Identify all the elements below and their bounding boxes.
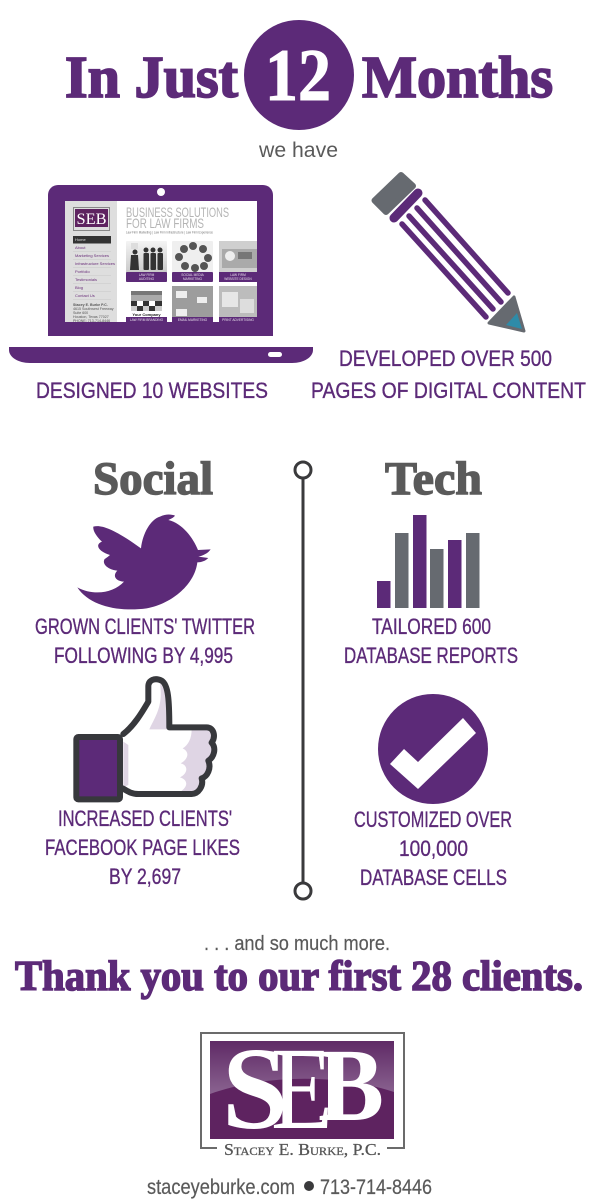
screenshot navigation: Marketing Services xyxy=(75,253,109,258)
icon: bar chart xyxy=(377,515,480,608)
caption: database cells xyxy=(354,807,512,890)
icon: twitter bird xyxy=(77,515,211,609)
screenshot tiles: Your Company xyxy=(132,312,161,317)
screenshot logo: SEB xyxy=(76,211,106,228)
title badge: 12: 12 xyxy=(265,35,331,117)
icon: pencil xyxy=(374,175,524,331)
screenshot navigation: Portfolio xyxy=(75,269,90,274)
screenshot address: 4615 Southwest Freeway xyxy=(73,307,114,311)
screenshot heading xyxy=(126,204,229,234)
caption: developed over 500 pages of digital content xyxy=(311,346,586,403)
heading: tech: Tech xyxy=(385,453,482,505)
caption: developed over 500 pages of digital content: DEVELOPED OVER 500 xyxy=(339,346,552,371)
screenshot address: Houston, Texas 77027 xyxy=(73,315,109,319)
logo: Stacey E. Burke, P.C.: E xyxy=(271,1023,333,1154)
screenshot heading: Law Firm Marketing | Law Firm Infrastructure | Law Firm Experience xyxy=(126,230,213,234)
caption: facebook page likes xyxy=(45,806,240,889)
screenshot address: Stacey E. Burke P.C. xyxy=(73,303,108,307)
caption: facebook page likes: FACEBOOK PAGE LIKES xyxy=(45,835,240,860)
caption: database reports: DATABASE REPORTS xyxy=(344,643,518,668)
footer contact line xyxy=(147,1176,432,1199)
heading: social: Social xyxy=(93,453,213,505)
caption: database reports xyxy=(344,614,518,668)
screenshot heading: BUSINESS SOLUTIONS xyxy=(126,204,229,220)
screenshot navigation: Home xyxy=(75,237,86,242)
caption: database reports: TAILORED 600 xyxy=(372,614,491,639)
logo: Stacey E. Burke, P.C.: Stacey E. Burke, P.C. xyxy=(224,1140,381,1159)
screenshot address: Suite 600 xyxy=(73,311,88,315)
caption: database cells: DATABASE CELLS xyxy=(360,865,507,890)
title badge: 12 xyxy=(244,20,354,130)
screenshot address xyxy=(73,303,114,323)
icon: laptop with website screenshot xyxy=(9,185,313,363)
closing headline: Thank you to our first 28 clients. xyxy=(15,954,583,1000)
caption: facebook page likes: INCREASED CLIENTS' xyxy=(58,806,232,831)
title: Months xyxy=(362,44,553,110)
screenshot tiles xyxy=(126,241,257,322)
logo: Stacey E. Burke, P.C.: B xyxy=(318,1028,384,1143)
caption: twitter following xyxy=(35,614,255,668)
screenshot tiles: SOCIAL MEDIA xyxy=(181,273,205,277)
title xyxy=(65,20,553,130)
screenshot tiles: LAW FIRM xyxy=(230,273,246,277)
screenshot tiles: EMAIL MARKETING xyxy=(178,318,208,322)
logo: Stacey E. Burke, P.C.: S xyxy=(222,1023,288,1154)
screenshot tiles: LAW FIRM BRANDING xyxy=(130,318,164,322)
screenshot address: PHONE: 713-714-8446 xyxy=(73,319,110,323)
screenshot tiles: LAW FIRM xyxy=(139,273,155,277)
screenshot navigation: Testimonials xyxy=(75,277,97,282)
icon: thumbs up xyxy=(76,679,214,799)
icon: check mark badge xyxy=(378,694,488,804)
text: and so much more: . . . and so much more. xyxy=(204,933,390,955)
center divider line xyxy=(295,462,311,899)
caption: database cells: CUSTOMIZED OVER xyxy=(354,807,512,832)
caption: twitter following: GROWN CLIENTS' TWITTER xyxy=(35,614,255,639)
caption: designed 10 websites: DESIGNED 10 WEBSITES xyxy=(36,378,268,403)
caption: database cells: 100,000 xyxy=(399,836,468,861)
screenshot logo xyxy=(74,208,110,230)
caption: facebook page likes: BY 2,697 xyxy=(109,864,181,889)
screenshot tiles: WEBSITE DESIGN xyxy=(224,277,252,281)
screenshot heading: FOR LAW FIRMS xyxy=(126,215,204,231)
screenshot navigation: Infrastructure Services xyxy=(75,261,115,266)
caption: twitter following: FOLLOWING BY 4,995 xyxy=(54,643,233,668)
subtitle: we have: we have xyxy=(258,139,338,162)
screenshot navigation: Blog xyxy=(75,285,83,290)
screenshot tiles: MARKETING xyxy=(183,277,202,281)
title: In Just xyxy=(65,44,238,110)
footer contact line: 713-714-8446 xyxy=(320,1176,432,1199)
screenshot tiles: AUDITING xyxy=(139,277,155,281)
screenshot navigation xyxy=(75,237,115,298)
screenshot tiles: PRINT ADVERTISING xyxy=(222,318,254,322)
screenshot navigation: Contact Us xyxy=(75,293,95,298)
website screenshot xyxy=(65,201,257,323)
logo: Stacey E. Burke, P.C. xyxy=(201,1023,404,1159)
footer contact line: staceyeburke.com xyxy=(147,1176,295,1199)
screenshot navigation: About xyxy=(75,245,86,250)
